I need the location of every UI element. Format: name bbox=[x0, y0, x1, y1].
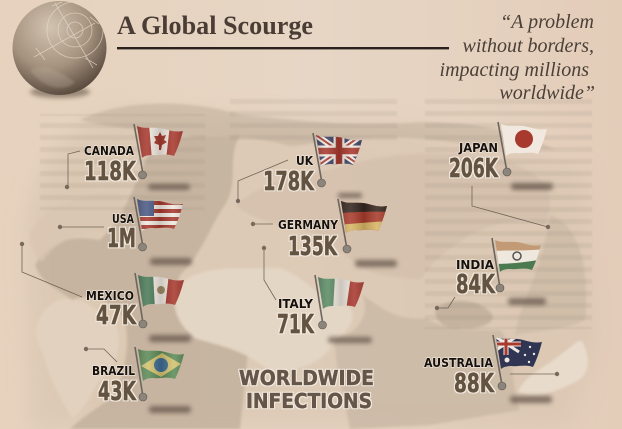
flag shadow bbox=[150, 258, 192, 265]
label: USA bbox=[112, 212, 135, 226]
column left bbox=[40, 114, 205, 210]
label: JAPAN bbox=[458, 141, 498, 155]
value: 178K bbox=[263, 167, 315, 197]
Canada bbox=[84, 124, 190, 190]
Italy bbox=[277, 275, 372, 343]
target crosshair bbox=[34, 2, 103, 68]
flag shadow bbox=[510, 396, 552, 403]
title rule bbox=[117, 47, 449, 49]
faded newspaper text bbox=[40, 94, 592, 329]
flag of USA bbox=[134, 197, 186, 251]
label: ITALY bbox=[278, 297, 313, 311]
worldwide infections caption: WORLDWIDE bbox=[239, 366, 374, 390]
flag shadow bbox=[328, 337, 372, 343]
quote: impacting millions bbox=[440, 59, 589, 81]
flag shadow bbox=[148, 184, 190, 190]
value: 43K bbox=[98, 377, 137, 407]
India bbox=[456, 238, 546, 305]
africa bbox=[174, 268, 353, 372]
south america bbox=[36, 299, 119, 418]
flag of India bbox=[492, 238, 544, 292]
globe sphere bbox=[12, 1, 106, 95]
flag shadow bbox=[511, 183, 553, 190]
Brazil bbox=[92, 347, 191, 413]
arctic ocean bbox=[80, 104, 555, 150]
value: 135K bbox=[288, 232, 338, 262]
flag of Canada bbox=[134, 124, 186, 179]
land haze bbox=[25, 108, 600, 429]
label: CANADA bbox=[84, 144, 135, 158]
continents on globe bbox=[30, 67, 75, 88]
USA bbox=[107, 197, 192, 265]
value: 47K bbox=[96, 301, 137, 331]
Japan bbox=[449, 122, 553, 190]
quote: worldwide” bbox=[499, 82, 595, 104]
globe icon bbox=[12, 1, 106, 98]
australia bbox=[518, 341, 588, 395]
quote: without borders, bbox=[462, 35, 594, 57]
Mexico bbox=[86, 273, 191, 342]
globe shadow bbox=[30, 86, 90, 98]
flag of UK bbox=[313, 133, 365, 187]
western pacific bbox=[515, 215, 586, 335]
label: GERMANY bbox=[278, 218, 338, 232]
quote: “A problem bbox=[500, 11, 594, 33]
bay of bengal bbox=[435, 301, 493, 328]
leader lines bbox=[20, 151, 559, 376]
flag of Brazil bbox=[135, 347, 187, 401]
worldwide infections caption bbox=[239, 366, 374, 413]
flag shadow bbox=[149, 335, 191, 342]
flag of Italy bbox=[315, 275, 367, 329]
title: A Global Scourge bbox=[117, 11, 313, 40]
europe and asia dark speckle bbox=[235, 153, 550, 280]
flag of Australia bbox=[493, 335, 545, 390]
quote bbox=[440, 11, 595, 104]
flag of Mexico bbox=[135, 273, 187, 328]
value: 1M bbox=[107, 224, 136, 254]
world map bbox=[25, 104, 600, 429]
worldwide infections caption: INFECTIONS bbox=[246, 389, 372, 413]
flag of Germany bbox=[338, 199, 390, 253]
value: 84K bbox=[456, 270, 496, 300]
label: MEXICO bbox=[86, 289, 134, 303]
column right bbox=[425, 94, 592, 329]
label: INDIA bbox=[456, 258, 495, 272]
label: UK bbox=[296, 154, 314, 168]
flag shadow bbox=[355, 260, 397, 267]
flag of Japan bbox=[498, 122, 550, 176]
flag shadow bbox=[508, 298, 546, 305]
UK bbox=[263, 133, 365, 198]
Germany bbox=[278, 199, 397, 267]
label: BRAZIL bbox=[92, 364, 135, 378]
label: AUSTRALIA bbox=[424, 356, 494, 370]
Australia bbox=[424, 335, 552, 403]
north america patches bbox=[30, 190, 124, 262]
indian ocean bbox=[335, 295, 520, 429]
value: 71K bbox=[277, 310, 315, 340]
value: 118K bbox=[84, 157, 137, 187]
column middle bbox=[230, 94, 397, 140]
north atlantic ocean bbox=[35, 135, 248, 429]
value: 206K bbox=[449, 154, 499, 184]
flag shadow bbox=[149, 406, 191, 413]
value: 88K bbox=[454, 369, 495, 399]
flag shadow bbox=[338, 193, 362, 198]
